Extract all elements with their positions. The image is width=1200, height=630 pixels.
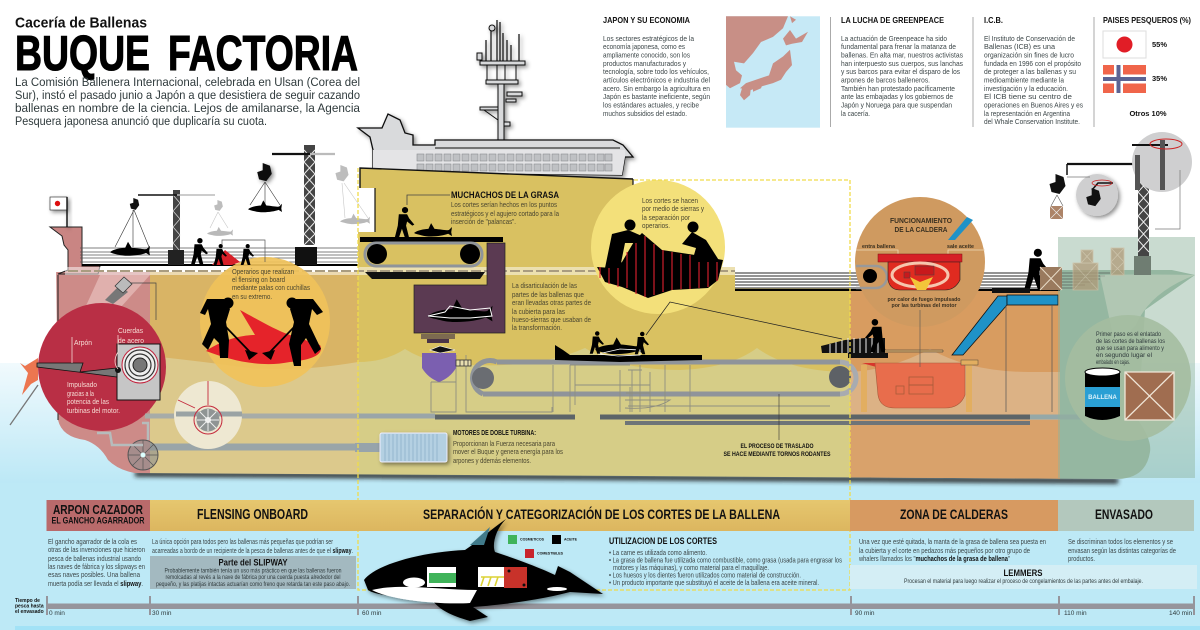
- harpoon: [37, 363, 117, 377]
- timeline ticks labels: 140 min: [1169, 610, 1193, 617]
- zone: flensing tan: [150, 272, 358, 482]
- column: I.C.B.: organización sin fines de lucro: [984, 50, 1074, 60]
- lower boiler: [861, 360, 978, 412]
- column: Japon y su economia: [603, 15, 710, 118]
- text: gancho agarrador: muerta podía ser llevada el slipway.: [48, 579, 143, 588]
- timeline label: Tiempo de: [15, 598, 40, 604]
- crane detail circle small: [1067, 174, 1118, 216]
- fat boys text: MUCHACHOS DE LA GRASA: [451, 190, 559, 201]
- packing text: Primer paso es el enlatado: [1096, 331, 1161, 338]
- intro paragraph: [15, 75, 360, 128]
- disarticulation text: partes de las ballenas que: [512, 290, 584, 299]
- timeline ticks labels: 30 min: [152, 610, 172, 617]
- boiler circle: [855, 197, 985, 327]
- column: La lucha de Greenpeace: La actuación de Greenpeace ha sido: [841, 34, 947, 43]
- ship: mast: [477, 20, 525, 140]
- value Norway: 35%: [1152, 74, 1167, 83]
- packing text: embalado en cajas.: [1096, 359, 1130, 366]
- timeline label: pesca hasta: [15, 604, 44, 610]
- column: I.C.B.: investigación y la educación.: [984, 84, 1068, 93]
- saw circle text: por medio de sierras y: [642, 204, 704, 213]
- packing text: que se usan para alimento y: [1096, 345, 1165, 352]
- dashed highlight frame: [358, 168, 850, 590]
- flag of Norway: [1103, 65, 1146, 93]
- column: Japon y su economia: los estándares actuales, y recibe: [603, 100, 699, 110]
- disarticulation text: hueso-sierras que usaban de: [512, 315, 591, 324]
- flag on stern: [50, 197, 67, 227]
- deck lines left: [80, 248, 358, 265]
- section header: Separacion: [358, 500, 850, 531]
- intro paragraph: ballenas en nombre de la ciencia. Lejos de amilanarse, la Agencia: [15, 101, 360, 115]
- motor text: MOTORES DE DOBLE TURBINA:: [453, 430, 536, 437]
- column: I.C.B.: [973, 15, 1083, 127]
- column: I.C.B.: de proteger a las ballenas y su: [984, 67, 1076, 76]
- text: envasado: Se discriminan todos los elementos y se: [1068, 537, 1173, 546]
- column: La lucha de Greenpeace: ante las embajadas y los gobiernos de: [841, 92, 953, 101]
- boiler leader line: [919, 310, 921, 367]
- label impulsado: [67, 380, 120, 415]
- packing text: de las cortes de ballenas los: [1096, 338, 1166, 345]
- text: gancho agarrador: otras de las invenciones que hicieron: [48, 545, 145, 554]
- zone: packing green: [1060, 270, 1200, 482]
- column: La lucha de Greenpeace: y sus barcos para evitar el disparo de los: [841, 67, 960, 76]
- column: I.C.B.: medioambiente mediante la: [984, 76, 1065, 84]
- zone: harpoon pink: [50, 272, 150, 482]
- conveyor platform with workers: [555, 302, 842, 362]
- disarticulation text: eran llevadas otras partes de: [512, 298, 591, 307]
- saw bench and worker: [821, 319, 943, 358]
- section header: Arpon cazador: EL GANCHO AGARRADOR: [52, 516, 145, 526]
- column: I.C.B.: la representación en Argentina: [984, 109, 1071, 118]
- flensing note: [232, 267, 310, 301]
- engine shafts and conveyor structure: [145, 355, 1085, 447]
- column: La lucha de Greenpeace: ballenas. En alta mar, nuestros activistas: [841, 50, 963, 60]
- intro paragraph: Sur), instó el pasado junio a Japón a que desistiera de seguir cazando: [15, 88, 360, 102]
- column: La lucha de Greenpeace: Japón y Noruega para que suspendan: [841, 100, 952, 110]
- text: envasado: [1068, 537, 1176, 563]
- column: I.C.B.: del Whale Conservation Institute.: [984, 117, 1080, 126]
- propeller detail circle: [174, 381, 242, 449]
- column: Japon y su economia: acero. Sin embargo la agricultura en: [603, 84, 710, 93]
- saw circle text: la separación por: [642, 213, 690, 222]
- text: gancho agarrador: esas naves posibles. Una ballena: [48, 570, 141, 579]
- ship: stern superstructure: [50, 227, 100, 420]
- fat boys text: [451, 190, 560, 226]
- disarticulation text: [512, 281, 591, 332]
- column: La lucha de Greenpeace: arpones de barcos balleneros.: [841, 76, 930, 84]
- column: Paises pesqueros: [1094, 15, 1191, 127]
- packing circle: [1065, 315, 1191, 441]
- motor text: arpones y ddemás elementos.: [453, 456, 531, 465]
- timeline ticks labels: 0 min: [49, 610, 65, 617]
- disarticulation text: La disarticulación de las: [512, 281, 577, 290]
- column: I.C.B.: Ballenas (ICB) es una: [984, 42, 1056, 51]
- blue pipe: [948, 217, 973, 240]
- label lines: [72, 335, 118, 369]
- timeline: [15, 596, 1195, 617]
- intro paragraph: Pesquera japonesa anunció que duplicaría su cuota.: [15, 114, 267, 128]
- dashed deck band: [65, 267, 735, 275]
- column: La lucha de Greenpeace: la cacería.: [841, 109, 870, 118]
- vertical hull lines: [1006, 305, 1052, 412]
- timeline ticks labels: [49, 610, 1193, 617]
- column: Japon y su economia: artículos electrónicos e industria del: [603, 76, 710, 84]
- crane centre with whale: [248, 145, 370, 265]
- column: Japon y su economia: ampliamente conocido, son los: [603, 50, 690, 60]
- worker with crate: [992, 249, 1062, 293]
- column: I.C.B.: fundada en 1996 con el propósito: [984, 59, 1081, 68]
- text: gancho agarrador: El gancho agarrador de la cola es: [48, 537, 137, 546]
- flensing note: mediante palas con cuchillas: [232, 283, 310, 292]
- title: DE LA CALDERA: [894, 225, 948, 234]
- callout: lemmers: LEMMERS: [1004, 568, 1042, 578]
- section header: Zona de calderas: ZONA DE CALDERAS: [900, 506, 1008, 522]
- deck workers flensing: [191, 238, 265, 265]
- flensing illustration: workers and red whale: [200, 298, 323, 366]
- section header: Envasado: [1058, 500, 1194, 531]
- saw circle text: operarios.: [642, 221, 670, 230]
- callout: parte del slipway: [150, 556, 356, 589]
- section header: Envasado: ENVASADO: [1095, 506, 1153, 522]
- column: La lucha de Greenpeace: [830, 15, 963, 127]
- title block: [15, 14, 360, 128]
- column: I.C.B.: operaciones en Buenos Aires y es: [984, 100, 1083, 110]
- callout: lemmers: Procesan el material para luego realizar el proceso de congelamientos de las partes antes del embalaje.: [904, 579, 1143, 585]
- orca legend: COSMETICOS: [520, 536, 544, 542]
- callout: parte del slipway: remolcadas al revés a la nave de fábrica por una cuerda puesta alrededor del: [166, 575, 340, 581]
- column: Japon y su economia: productos manufacturados y: [603, 59, 686, 68]
- separation saw circle: [591, 180, 725, 314]
- kicker: Cacería de Ballenas: [15, 14, 147, 32]
- harpoon launcher on deck: [105, 277, 156, 320]
- value Japan: 55%: [1152, 40, 1167, 49]
- text: flensing: [152, 537, 353, 555]
- saw circle illustration: [597, 220, 723, 298]
- label impulsado: potencia de las: [67, 397, 109, 406]
- crate: [1125, 372, 1174, 420]
- blue ramp: [952, 295, 1058, 355]
- packing text: [1096, 331, 1166, 366]
- flensing circle: [200, 257, 330, 387]
- crane detail circle large: [1132, 132, 1192, 229]
- splash and harpoon line: [10, 358, 38, 425]
- disarticulation text: la cubierta para las: [512, 307, 565, 316]
- saw circle text: Los cortes se hacen: [642, 196, 698, 205]
- motor text: [453, 430, 563, 465]
- section header: Flensing onboard: [150, 500, 358, 531]
- text: envasado: productos.: [1068, 554, 1095, 563]
- return drum left: [472, 367, 494, 389]
- timeline ticks labels: 90 min: [855, 610, 875, 617]
- crane left with whale: [110, 190, 233, 265]
- utilizacion de los cortes: [609, 536, 842, 587]
- hull bow curve: [1100, 274, 1195, 368]
- ship: hull shadow: [135, 474, 1118, 481]
- label cuerdas: Cuerdas: [118, 326, 143, 335]
- crates on deck: [1073, 248, 1124, 290]
- caption: [888, 297, 961, 309]
- orca legend: [508, 535, 577, 558]
- orca legend: COMESTIBLES: [537, 550, 563, 556]
- purple bowl: [422, 346, 471, 382]
- callout: parte del slipway: pequeño, y las platijas intactas actuarían como freno que retarda tan este paso abajo.: [156, 582, 350, 588]
- utilizacion de los cortes: • La grasa de ballena fue utilizada como combustible, como grasa (usada para engrasar los: [609, 556, 842, 564]
- label impulsado: Impulsado: [67, 380, 97, 389]
- column: I.C.B.: El ICB tiene su centro de: [984, 92, 1072, 101]
- timeline label: [15, 598, 44, 615]
- motor text: mover el Buque y genera energía para los: [453, 447, 563, 456]
- text: gancho agarrador: [48, 537, 145, 588]
- fat boys conveyor: [360, 195, 503, 279]
- zone: separation yellow upper: [358, 168, 850, 372]
- transfer note: SE HACE MEDIANTE TORNOS RODANTES: [724, 451, 831, 458]
- flensing note: en su extremo.: [232, 292, 272, 301]
- column: La lucha de Greenpeace: También han protestado pacíficamente: [841, 84, 955, 93]
- flensing note: el flensing on board: [232, 275, 285, 284]
- timeline ticks labels: 60 min: [362, 610, 382, 617]
- text: flensing: acarreadas a bordo de un recipiente de la pesca de ballenas antes de que el slipway.: [152, 546, 353, 555]
- orca with cut diagram: [364, 519, 603, 621]
- section header: Separacion: SEPARACIÓN Y CATEGORIZACIÓN DE LOS CORTES DE LA BALLENA: [423, 505, 780, 522]
- return drum right: [829, 366, 851, 388]
- text: flensing: La única opción para todos pero las ballenas más pequeñas que podrían ser: [152, 537, 333, 546]
- map of Japan: [726, 16, 820, 128]
- section header: Zona de calderas: [850, 500, 1058, 531]
- column: I.C.B.: I.C.B.: [984, 15, 1003, 25]
- label in: entra ballena: [862, 244, 896, 250]
- label arpon: Arpón: [74, 338, 92, 347]
- column: I.C.B.: El Instituto de Conservación de: [984, 34, 1075, 43]
- winch: [115, 344, 160, 400]
- motor text: Proporcionan la Fuerza necesaria para: [453, 439, 556, 448]
- flag of Japan: [1103, 31, 1146, 58]
- fat boys text: estratégicos y el agujero cortado para la: [451, 209, 560, 218]
- column: Japon y su economia: muchos subsidios del estado.: [603, 109, 687, 118]
- column: La lucha de Greenpeace: fundamental para frenar la matanza de: [841, 42, 956, 51]
- text: gancho agarrador: las naves de fábrica y los slipways en: [48, 562, 145, 571]
- timeline label: el envasado: [15, 609, 44, 615]
- text: zona de calderas: la cubierta y el corte en pedazos más pequeños por otro grupo de: [859, 546, 1030, 555]
- flensing note: Operarios que realizan: [232, 267, 294, 276]
- main title: FACTORIA: [168, 27, 358, 81]
- packing zone overlay: [1058, 237, 1195, 478]
- furnace: [878, 254, 962, 290]
- label cuerdas: de acero: [118, 336, 144, 345]
- column: La lucha de Greenpeace: LA LUCHA DE GREENPEACE: [841, 15, 944, 25]
- zone: boiler orange: [850, 290, 1060, 482]
- column: Japon y su economia: Los sectores estratégicos de la: [603, 34, 695, 43]
- text: zona de calderas: whalers llamados los "muchachos de la grasa de ballena": [858, 554, 1010, 563]
- callout: parte del slipway: Parte del SLIPWAY: [218, 558, 288, 568]
- propeller: [97, 423, 158, 470]
- callout: lemmers: [850, 565, 1197, 589]
- title: [890, 216, 952, 234]
- label impulsado: turbinas del motor.: [67, 406, 120, 415]
- utilizacion de los cortes: • Los huesos y los dientes fueron utilizados como material de construcción.: [609, 570, 801, 580]
- main title: [15, 27, 358, 81]
- section header: Arpon cazador: [46, 500, 150, 531]
- label impulsado: gracias a la: [67, 389, 95, 398]
- column: La lucha de Greenpeace: han interpuesto sus cuerpos, sus lanchas: [841, 59, 963, 68]
- fat boys text: inserción de "palancas".: [451, 217, 516, 226]
- motor: [355, 433, 447, 462]
- harpoon circle: [37, 303, 166, 431]
- deck lines right: [735, 273, 1110, 290]
- zone: separation lower: [358, 340, 850, 482]
- fat boys text: Los cortes serían hechos en los puntos: [451, 200, 557, 209]
- caption: por calor de fuego impulsado: [888, 297, 961, 303]
- text: zona de calderas: [858, 537, 1046, 563]
- others value: Otros 10%: [1129, 109, 1167, 118]
- main title: BUQUE: [15, 27, 150, 81]
- barrel: BALLENA: [1088, 395, 1117, 401]
- timeline ticks labels: 110 min: [1064, 610, 1087, 617]
- column: Japon y su economia: Japón es bastante ineficiente, según: [603, 92, 710, 101]
- utilizacion de los cortes: UTILIZACION DE LOS CORTES: [609, 536, 717, 546]
- utilizacion de los cortes: • Un producto importante que substituyó el aceite de la ballena era aceite mineral.: [609, 578, 819, 587]
- drum: [856, 266, 887, 288]
- transfer note: EL PROCESO DE TRASLADO: [740, 443, 814, 450]
- utilizacion de los cortes: • La carne es utilizada como alimento.: [609, 548, 707, 557]
- label out: sale aceite: [947, 244, 974, 250]
- callout: parte del slipway: Probablemente también tenía un uso más práctico en que las ballenas fueron: [164, 568, 342, 574]
- text: zona de calderas: Una vez que esté quitada, la manta de la grasa de ballena sea puesta en: [859, 537, 1046, 546]
- title: FUNCIONAMIENTO: [890, 216, 952, 225]
- disarticulation text: la transformación.: [512, 323, 562, 332]
- utilizacion de los cortes: motores y las máquinas), y como material para el maquillaje.: [613, 563, 769, 572]
- intro paragraph: La Comisión Ballenera Internacional, celebrada en Ulsan (Corea del: [15, 75, 360, 89]
- transfer note: [724, 394, 831, 458]
- orca legend: ACEITE: [564, 536, 577, 542]
- column: Japon y su economia: tecnología, sobre todo los vehículos,: [603, 67, 709, 76]
- purple chute with whale: [414, 243, 505, 343]
- saw circle text: [642, 196, 704, 230]
- label cuerdas: [118, 326, 144, 345]
- caption: por las turbinas del motor: [892, 303, 957, 309]
- section header: Arpon cazador: ARPON CAZADOR: [53, 502, 143, 517]
- ship: gray bridge with windows: [358, 114, 633, 175]
- text: gancho agarrador: pesca de ballenas industrial usando: [48, 554, 141, 563]
- right crane: [1050, 153, 1151, 275]
- column: Japon y su economia: JAPON Y SU ECONOMIA: [603, 15, 690, 25]
- column: Japon y su economia: economía japonesa, como es: [603, 42, 685, 51]
- packing text: en segundo lugar el: [1096, 352, 1153, 359]
- ship: hull colour zones: [50, 270, 1200, 482]
- section header: Flensing onboard: FLENSING ONBOARD: [197, 507, 308, 523]
